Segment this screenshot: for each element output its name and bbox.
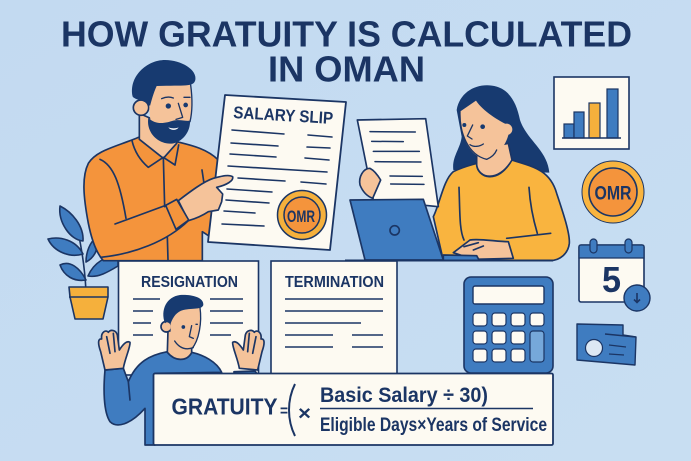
man collar (132, 141, 204, 260)
icon: OMR coin (582, 161, 644, 223)
salary slip document (208, 95, 346, 250)
title (61, 14, 632, 90)
icon: calendar (579, 239, 650, 311)
woman hand (453, 240, 513, 259)
formula box: × (298, 403, 311, 425)
salary slip document: SALARY SLIP (233, 103, 334, 128)
title: HOW GRATUITY IS CALCULATED (61, 14, 632, 54)
man pointing hand (166, 176, 233, 229)
employee left hand (99, 330, 130, 370)
employee right hand (233, 330, 264, 370)
icon: calendar: 5 (602, 259, 621, 300)
formula box: = (280, 403, 288, 420)
woman face (460, 101, 512, 176)
formula numerator: Basic Salary ÷ 30) (320, 384, 488, 407)
formula denominator: Eligible Days×Years of Service (320, 415, 547, 436)
resignation document: RESIGNATION (141, 274, 238, 291)
termination document (271, 261, 397, 375)
salary slip lines (222, 130, 332, 226)
woman at laptop (350, 85, 569, 261)
icon: potted plant (48, 206, 118, 319)
employee sweater (104, 352, 222, 445)
woman hair (453, 85, 549, 173)
man head (132, 60, 196, 158)
resignation document (118, 261, 258, 375)
title: IN OMAN (268, 48, 425, 90)
desk line (345, 260, 553, 262)
formula label: GRATUITY (172, 394, 278, 420)
woman paper (357, 119, 438, 207)
formula box (154, 374, 553, 445)
man shirt (84, 137, 218, 261)
icon: OMR coin: OMR (594, 184, 632, 204)
OMR stamp: OMR (287, 207, 315, 226)
employee head (161, 295, 203, 359)
icon: bar chart card (554, 77, 629, 149)
employee with raised hands (99, 295, 264, 445)
woman sweater (433, 160, 569, 261)
icon: calculator (464, 277, 553, 373)
man pointing at the salary slip (84, 60, 218, 261)
laptop (350, 199, 479, 261)
icon: ID cards (577, 324, 636, 365)
termination document: TERMINATION (285, 274, 384, 291)
OMR stamp (278, 190, 326, 240)
